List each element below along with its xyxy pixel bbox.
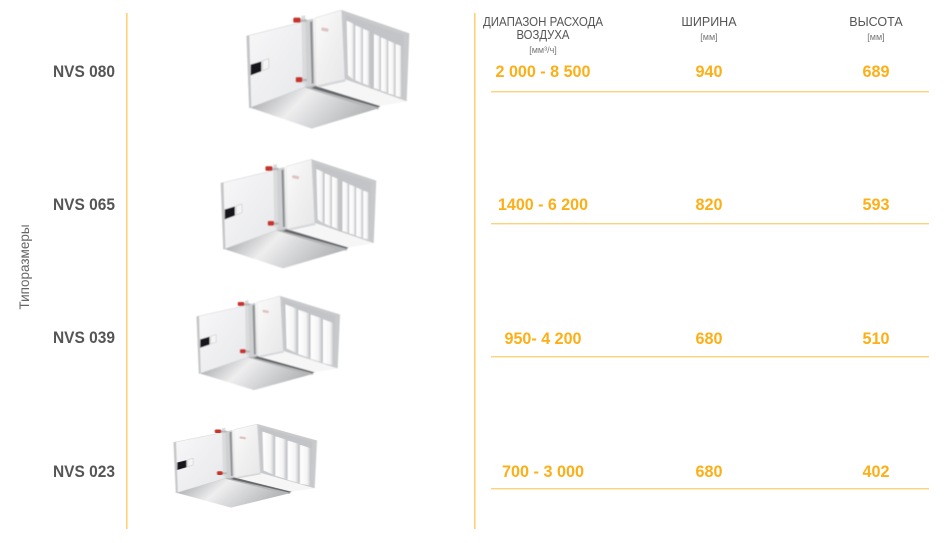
left divider: [126, 13, 128, 529]
unit illustration NVS 023: [174, 424, 317, 508]
model name NVS 023: NVS 023: [53, 462, 115, 481]
values NVS 039: 680: [696, 329, 722, 348]
values NVS 065: 1400 - 6 200: [498, 195, 588, 214]
row: NVS 080: [53, 10, 929, 129]
column heading: air flow range: [483, 15, 604, 55]
column heading: air flow range: ДИАПАЗОН РАСХОДА: [483, 15, 604, 29]
values NVS 039: 510: [862, 329, 890, 348]
values NVS 023: 700 - 3 000: [502, 462, 584, 481]
row: NVS 065: [53, 159, 929, 268]
vertical axis label: Типоразмеры: [17, 224, 32, 310]
values NVS 080: 940: [696, 62, 722, 81]
values NVS 080: 689: [862, 62, 890, 81]
values NVS 080: [496, 62, 890, 81]
column heading: air flow range: [мм³/ч]: [529, 45, 557, 55]
values NVS 023: [502, 462, 890, 481]
column heading: width: [681, 15, 737, 42]
column heading: air flow range: ВОЗДУХА: [516, 28, 570, 42]
column heading: height: ВЫСОТА: [849, 15, 903, 29]
column heading: width: ШИРИНА: [681, 15, 737, 29]
values NVS 080: 2 000 - 8 500: [496, 62, 590, 81]
centre divider: [474, 13, 476, 529]
values NVS 065: [498, 195, 890, 214]
values NVS 023: 680: [696, 462, 722, 481]
values NVS 039: 950- 4 200: [504, 329, 582, 348]
values NVS 065: 593: [862, 195, 890, 214]
unit illustration NVS 080: [247, 10, 409, 129]
values NVS 023: 402: [862, 462, 890, 481]
values NVS 065: 820: [696, 195, 722, 214]
model name NVS 080: NVS 080: [53, 62, 115, 81]
row: NVS 023: [53, 424, 929, 508]
model name NVS 065: NVS 065: [53, 195, 115, 214]
column heading: width: [мм]: [700, 32, 718, 42]
model name NVS 039: NVS 039: [53, 328, 115, 347]
column heading: height: [мм]: [867, 32, 885, 42]
values NVS 039: [504, 329, 890, 348]
column heading: height: [849, 15, 903, 42]
unit illustration NVS 039: [197, 296, 340, 390]
row: NVS 039: [53, 296, 929, 390]
unit illustration NVS 065: [221, 159, 376, 268]
